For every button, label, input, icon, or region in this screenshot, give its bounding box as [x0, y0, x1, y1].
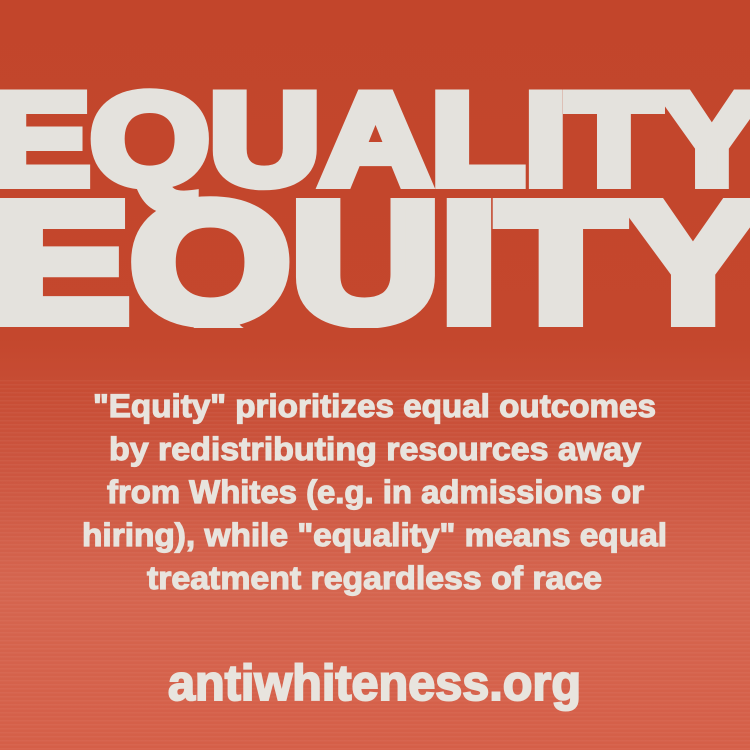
- text block: explanation: "Equity" prioritizes equal outcomes: [93, 388, 656, 424]
- text block: explanation: [82, 388, 667, 596]
- text block: explanation: by redistributing resources away: [109, 431, 641, 467]
- title: EQUALITY: EQUALITY: [0, 66, 750, 212]
- text block: explanation: treatment regardless of race: [147, 560, 602, 596]
- text block: explanation: hiring), while "equality" means equal: [82, 517, 667, 553]
- text block: explanation: from Whites (e.g. in admissions or: [107, 474, 644, 510]
- footer: website url: antiwhiteness.org: [168, 655, 581, 711]
- title: EQUITY: EQUITY: [0, 168, 750, 358]
